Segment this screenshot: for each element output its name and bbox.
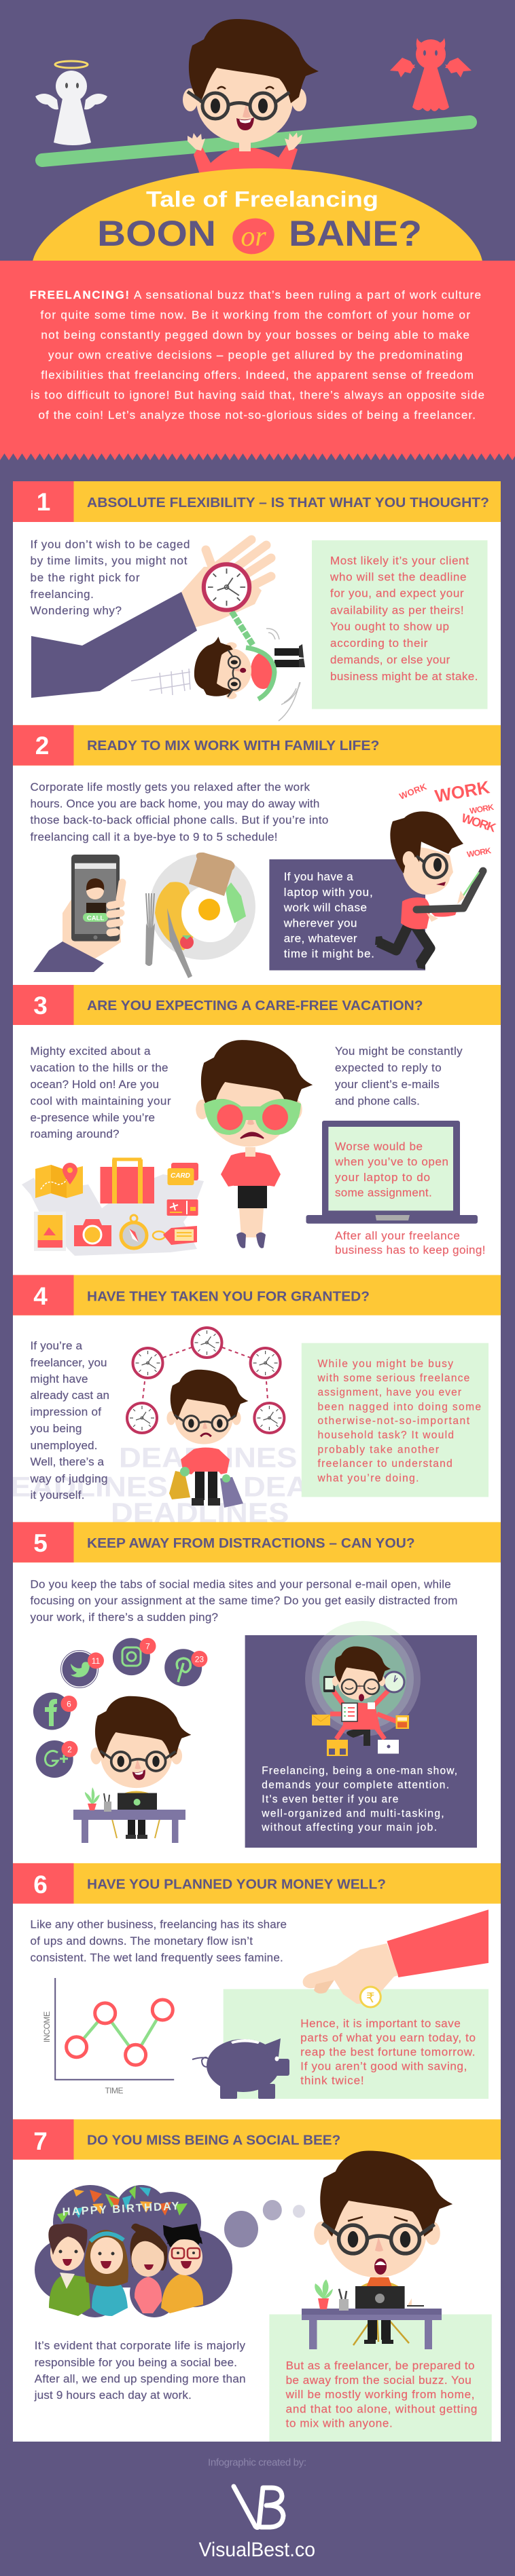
word cloud: work: WORK (398, 781, 429, 802)
section 1 text: by time limits, you might not (30, 555, 188, 567)
section 5 text: focusing on your assignment at the same time? Do you get easily distracted from (30, 1594, 457, 1607)
callout: multitasking: Freelancing, being a one-man show, (262, 1765, 457, 1776)
section 3 left text (30, 1045, 171, 1140)
icon: compass (121, 1215, 147, 1248)
section 4 header (13, 1275, 501, 1315)
section 4 text: unemployed. (30, 1439, 98, 1452)
section 4 text: you being (30, 1422, 82, 1435)
section 3 header: ARE YOU EXPECTING A CARE-FREE VACATION? (87, 998, 423, 1013)
icon: twitter: 11 (92, 1656, 101, 1666)
title dome (33, 168, 482, 261)
section 7 left text: It’s evident that corporate life is majorly (35, 2339, 246, 2352)
callout: section 4: household task? It would (318, 1430, 454, 1441)
section 3 closing note (335, 1229, 485, 1256)
illustration: laptop with worse-case note: when you’ve to open (334, 1155, 448, 1168)
section 3 right text: expected to reply to (335, 1062, 442, 1075)
panel: section 7 (13, 2119, 501, 2442)
section 2 header: READY TO MIX WORK WITH FAMILY LIFE? (87, 738, 379, 753)
line chart: income over time (42, 1978, 174, 2095)
icon: folded map (35, 1163, 83, 1198)
icon: pinterest (164, 1649, 207, 1686)
section 3 left text: cool with maintaining your (30, 1095, 171, 1108)
footer (198, 2457, 315, 2561)
deadlines watermark: DEADLINES (119, 1442, 298, 1474)
panel: section 5 (13, 1522, 501, 1848)
callout: laptop chases you: time it might be. (284, 947, 374, 960)
section 2 header (13, 725, 501, 766)
deadlines watermark: DEADLINES (111, 1497, 289, 1529)
word cloud: work: WORK (469, 802, 495, 816)
logo wordmark: VisualBest.co (198, 2539, 315, 2561)
section 1 text (30, 538, 190, 617)
callout: away from social buzz: will be mostly working from home, (285, 2388, 474, 2401)
callout: section 4: freelancer to understand (318, 1458, 452, 1470)
illustration: hand dropping coin: ₹ (366, 1990, 375, 2006)
footer credit: Infographic created by: (208, 2457, 306, 2469)
axis label: time: TIME (105, 2086, 124, 2095)
callout: multitasking (245, 1621, 477, 1848)
panel: section 4 (0, 1275, 501, 1529)
panel: section 3 (13, 985, 501, 1256)
illustration: clocks around boy with shopping bags (127, 1328, 284, 1508)
section 1 header (13, 481, 501, 522)
section 4 text (30, 1339, 109, 1501)
illustration: phone in hand: CALL (87, 915, 104, 922)
deadlines watermark: DEADLINES (243, 1470, 421, 1503)
callout: multitasking: demands your complete attention. (262, 1779, 449, 1791)
illustration: phone in hand (33, 855, 122, 972)
section 3 left text: roaming around? (30, 1127, 120, 1140)
illustration: meditating boy with six arms (312, 1647, 409, 1756)
callout: multitasking: It’s even better if you are (262, 1793, 398, 1805)
illustration: laptop with worse-case note: your laptop to do (335, 1171, 430, 1184)
intro text: A sensational buzz that’s been ruling a part of work culture (134, 288, 481, 301)
section 6 text (30, 1918, 287, 1964)
word cloud: work (398, 777, 497, 859)
icon: pinterest: 23 (195, 1655, 204, 1664)
panel: introduction (0, 261, 515, 460)
hero illustration: see-saw with boy, angel and devil (35, 19, 472, 176)
callout: section 4: what you’re doing. (317, 1473, 419, 1485)
callout: section 1: who will set the deadline (330, 570, 466, 583)
title: Bane: BANE? (289, 214, 422, 254)
illustration: four friends (48, 2224, 203, 2316)
callout: laptop chases you (269, 859, 425, 971)
thought bubbles (224, 2200, 305, 2247)
section 5 text: your work, if there’s a sudden ping? (30, 1611, 218, 1624)
icon: piggy bank (192, 2038, 289, 2099)
illustration: laptop with worse-case note (306, 1121, 478, 1224)
boy character (183, 19, 319, 176)
section 4 text: impression of (30, 1406, 101, 1419)
callout: section 1: for you, and expect your (330, 586, 464, 600)
badge: or (228, 214, 279, 259)
section 4 text: way of judging (30, 1472, 107, 1485)
callout: section 1: You ought to show up (330, 620, 449, 633)
word cloud: work: WORK (460, 811, 497, 835)
section 5 text: Do you keep the tabs of social media sites and your personal e-mail open, while (30, 1578, 451, 1590)
icon: facebook: 6 (67, 1700, 71, 1709)
see-saw plank (42, 122, 470, 160)
section 1 text: be the right pick for (30, 571, 140, 584)
bunting (57, 2186, 188, 2222)
section 3 right text: your client’s e-mails (335, 1078, 440, 1091)
intro text: your own creative decisions – people get allured by the predominating (48, 349, 463, 361)
callout: section 4: otherwise-not-so-important (318, 1415, 470, 1427)
callout: multitasking: without affecting your main job. (261, 1822, 437, 1833)
callout: save money: think twice! (300, 2074, 364, 2087)
illustration: travel items on world map (22, 1159, 204, 1256)
title: Boon: BOON (97, 214, 216, 254)
icon: credit card (167, 1163, 198, 1185)
section 6 header: 6 (33, 1871, 48, 1899)
section 5 header: 5 (33, 1529, 48, 1557)
section 2 text: hours. Once you are back home, you may do away with (30, 797, 319, 810)
banner text: HAPPY BIRTHDAY (62, 2200, 179, 2218)
section 2 text: freelancing call it a bye-bye to 9 to 5 schedule! (30, 830, 277, 843)
section 7 header: DO YOU MISS BEING A SOCIAL BEE? (87, 2133, 340, 2148)
icon: travel poster (34, 1212, 66, 1251)
callout: section 4 (302, 1343, 489, 1497)
illustration: birthday thought cloud (35, 2185, 232, 2317)
section 3 right text: and phone calls. (335, 1095, 420, 1108)
callout: section 4: with some serious freelance (317, 1373, 469, 1384)
callout: laptop chases you: work will chase (283, 901, 367, 914)
callout: away from social buzz: to mix with anyone. (286, 2416, 393, 2429)
callout: multitasking: well-organized and multi-tasking, (261, 1808, 444, 1819)
section 2 text (30, 781, 328, 843)
callout: section 4: been nagged into doing some (318, 1402, 481, 1413)
section 7 left text: responsible for you being a social bee. (35, 2356, 237, 2369)
callout: away from social buzz: But as a freelancer, be prepared to (286, 2359, 474, 2372)
callout: section 1 (312, 540, 488, 709)
section 5 header: KEEP AWAY FROM DISTRACTIONS – CAN YOU? (87, 1535, 415, 1551)
callout: laptop chases you: wherever you (283, 917, 357, 930)
callout: save money: If you aren’t good with saving, (300, 2060, 467, 2073)
section 3 right text: You might be constantly (335, 1045, 463, 1058)
callout: save money: Hence, it is important to save (300, 2017, 461, 2030)
callout: section 4: assignment, have you ever (318, 1387, 461, 1398)
callout: section 1: demands, or else your (330, 654, 450, 667)
section 4 text: Well, there’s a (30, 1455, 105, 1468)
intro text: for quite some time now. Be it working from the comfort of your home or (41, 308, 470, 322)
callout: section 1: business might be at stake. (330, 670, 478, 683)
section 1 header: 1 (37, 488, 50, 516)
white content panel (13, 481, 501, 2442)
section 3 closing note: After all your freelance (335, 1229, 460, 1242)
section 3 left text: vacation to the hills or the (30, 1062, 168, 1075)
intro text: flexibilities that freelancing offers. Indeed, the apparent sense of freedom (41, 369, 474, 381)
section 3 left text: ocean? Hold on! Are you (30, 1078, 159, 1091)
section 2 text: those back-to-back official phone calls. But if you’re into (30, 813, 328, 826)
section 4 text: it yourself. (30, 1489, 84, 1501)
icon: twitter (61, 1651, 104, 1687)
intro text: is too difficult to ignore! But having said that, there’s always an opposite side (31, 388, 484, 402)
callout: section 1: Most likely it’s your client (330, 554, 469, 567)
icon: google plus (36, 1740, 77, 1778)
section 6 text: Like any other business, freelancing has its share (30, 1918, 287, 1931)
intro text: of the coin! Let’s analyze those not-so-glorious sides of being a freelancer. (38, 409, 476, 422)
illustration: smiling boy at desk (73, 1696, 191, 1843)
callout: section 1: availability as per theirs! (330, 604, 464, 616)
icon: instagram: 7 (145, 1641, 150, 1651)
section 2 text: Corporate life mostly gets you relaxed after the work (30, 781, 310, 794)
callout: laptop chases you: laptop with you, (284, 886, 373, 899)
deadlines watermark (13, 1447, 302, 1522)
world map backdrop (22, 1174, 204, 1256)
callout: section 4: While you might be busy (318, 1358, 453, 1370)
title: Tale of Freelancing: Tale of Freelancing (146, 187, 378, 212)
section 1 text: freelancing. (30, 588, 94, 601)
intro text (30, 288, 484, 422)
icon: devil (390, 38, 472, 111)
panel: section 2 (13, 725, 501, 978)
illustration: surprised boy at desk (302, 2151, 452, 2349)
callout: away from social buzz (269, 2315, 492, 2442)
illustration: hand holding watch with falling boy (31, 540, 305, 721)
section 3 closing note: business has to keep going! (335, 1244, 485, 1256)
section 4 text: freelancer, you (30, 1356, 107, 1369)
illustration: hand dropping coin (303, 1909, 489, 2007)
section 6 header: HAVE YOU PLANNED YOUR MONEY WELL? (87, 1876, 386, 1892)
callout: save money: reap the best fortune tomorrow. (300, 2046, 476, 2059)
section 6 text: of ups and downs. The monetary flow isn’t (30, 1935, 253, 1947)
callout: save money (192, 1909, 489, 2099)
section 1 text: If you don’t wish to be caged (30, 538, 190, 551)
section 7 left text: After all, we end up spending more than (35, 2372, 246, 2385)
intro text: not being constantly pegged down by your bosses or being able to make (41, 329, 469, 341)
section 3 header (13, 985, 501, 1025)
section 7 left text: just 9 hours each day at work. (34, 2389, 192, 2402)
logo: VB (234, 2486, 283, 2528)
word cloud: work: WORK (466, 846, 492, 859)
section 3 right text (335, 1045, 463, 1108)
callout: section 1: according to their (330, 637, 428, 650)
intro text: FREELANCING! (30, 288, 129, 301)
section 3 left text: Mighty excited about a (30, 1045, 151, 1058)
callout: section 4: probably take another (318, 1444, 439, 1456)
illustration: running boy with laptop (375, 811, 483, 969)
icon: facebook (33, 1693, 77, 1730)
illustration: sad boy with sunglasses (196, 1040, 313, 1248)
icon: luggage tag (153, 1226, 197, 1245)
badge: or: or (241, 221, 266, 253)
icon: camera (74, 1219, 111, 1246)
icon: angel (35, 61, 107, 145)
icon: credit card: CARD (171, 1172, 190, 1180)
icon: instagram (113, 1638, 156, 1675)
section 6 header (13, 1863, 501, 1903)
section 4 header: HAVE THEY TAKEN YOU FOR GRANTED? (87, 1288, 370, 1304)
section 7 header: 7 (33, 2127, 48, 2155)
section 4 text: If you’re a (30, 1339, 83, 1352)
section 1 header: ABSOLUTE FLEXIBILITY – IS THAT WHAT YOU THOUGHT? (87, 495, 489, 510)
word cloud: work: WORK (433, 777, 491, 806)
panel: section 6 (13, 1863, 501, 2099)
section 3 header: 3 (33, 992, 48, 1020)
illustration: laptop with worse-case note: some assignment. (335, 1186, 432, 1199)
section 4 header: 4 (33, 1282, 48, 1310)
callout: laptop chases you: are, whatever (284, 932, 357, 945)
callout: laptop chases you: If you have a (284, 870, 353, 883)
section 6 text: consistent. The wet land frequently sees famine. (30, 1951, 283, 1964)
callout: away from social buzz: and that too alone, without getting (286, 2403, 477, 2415)
icon: suitcase (101, 1159, 154, 1203)
panel: section 1 (13, 481, 501, 721)
section 5 header (13, 1522, 501, 1563)
icon: google plus: 2 (67, 1744, 72, 1754)
illustration: breakfast plate (145, 853, 255, 978)
callout: away from social buzz: be away from the social buzz. You (286, 2374, 472, 2387)
icon: plane ticket (167, 1199, 198, 1216)
section 5 text (30, 1578, 457, 1624)
illustration: laptop with worse-case note: Worse would be (335, 1140, 423, 1153)
thought cloud shape (35, 2185, 232, 2317)
section 4 text: might have (30, 1373, 88, 1385)
section 1 text: Wondering why? (30, 604, 122, 617)
callout: save money: parts of what you earn today, to (300, 2032, 476, 2045)
section 7 header (13, 2119, 501, 2160)
section 2 header: 2 (35, 732, 49, 760)
section 3 left text: e-presence while you’re (30, 1111, 155, 1124)
section 7 left text (34, 2339, 246, 2402)
social media notification icons (33, 1638, 207, 1778)
axis label: income: INCOME (42, 2011, 52, 2042)
section 4 text: already cast an (30, 1389, 109, 1402)
